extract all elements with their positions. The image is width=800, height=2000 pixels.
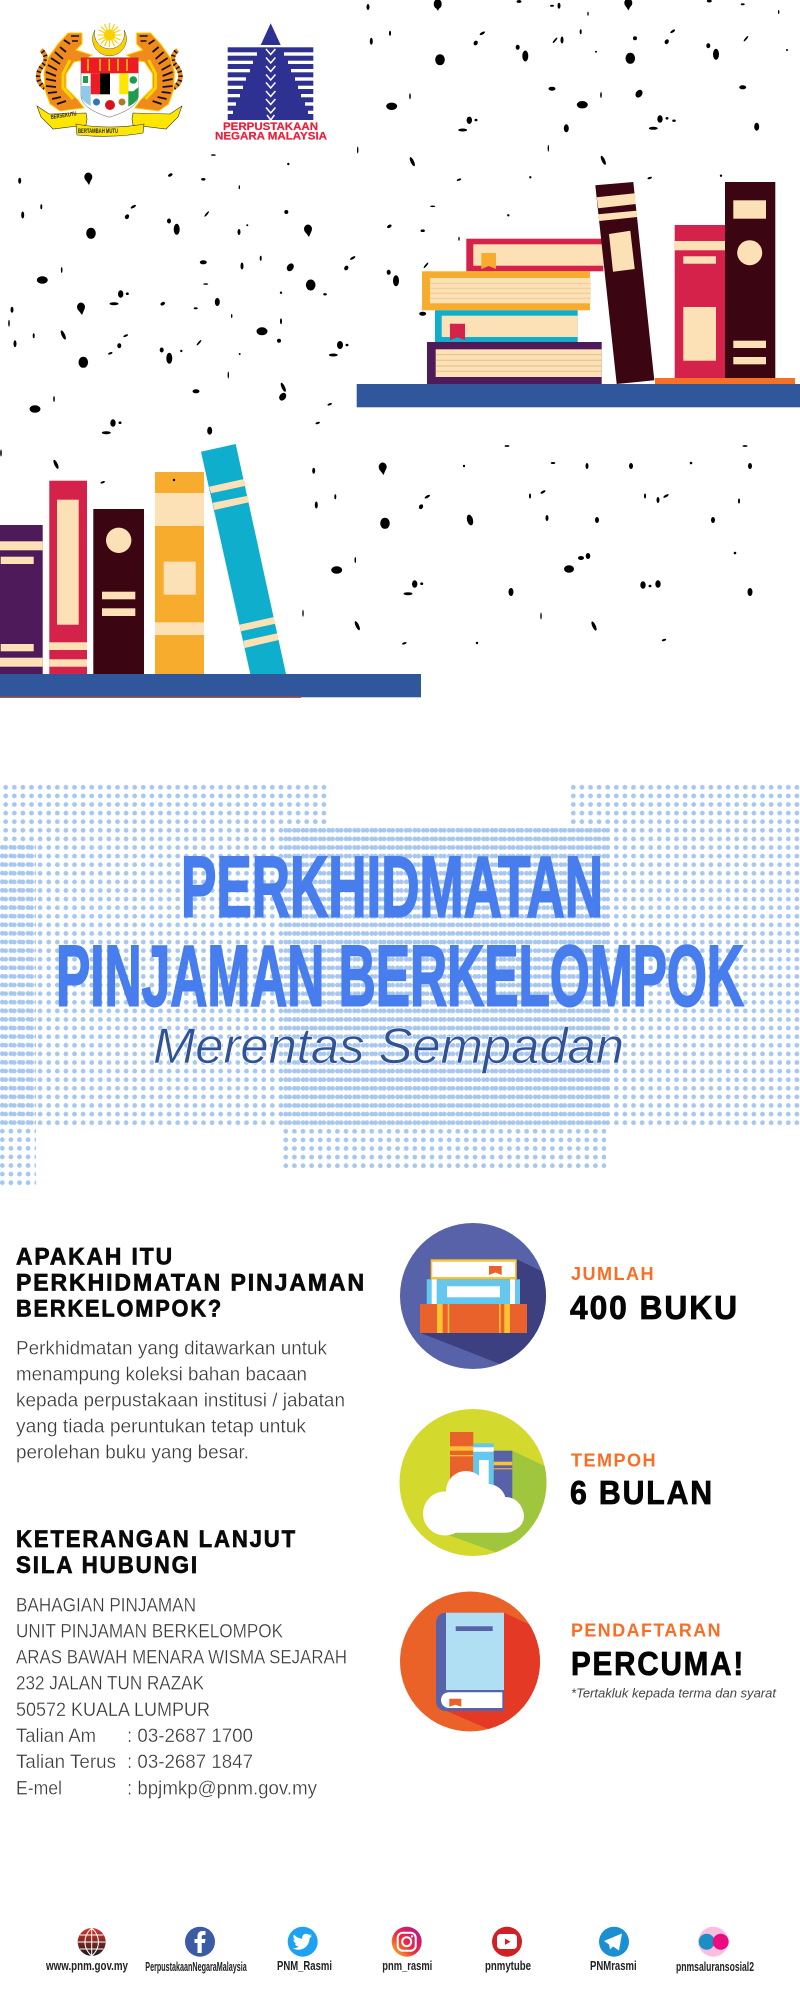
facebook: PerpustakaanNegaraMalaysia bbox=[145, 1960, 247, 1974]
telegram bbox=[590, 1927, 637, 1973]
instagram: pnm_rasmi bbox=[382, 1959, 432, 1973]
motto ribbon bbox=[37, 106, 182, 136]
stat: loan period bbox=[570, 1450, 714, 1511]
text block: contact details bbox=[16, 1526, 347, 1800]
red book bbox=[49, 481, 87, 674]
address and phones: : 03-2687 1847 bbox=[127, 1751, 253, 1773]
upright red book bbox=[675, 225, 725, 378]
address and phones: ARAS BAWAH MENARA WISMA SEJARAH bbox=[16, 1646, 347, 1668]
right tiger bbox=[127, 33, 180, 111]
description: menampung koleksi bahan bacaan bbox=[16, 1364, 307, 1386]
heading: APAKAH ITU bbox=[16, 1244, 174, 1270]
halftone dots bbox=[0, 783, 800, 1187]
logo wordmark bbox=[215, 121, 327, 142]
leaning dark book bbox=[595, 182, 654, 384]
telegram: PNMrasmi bbox=[590, 1959, 637, 1973]
motto ribbon: BERSEKUTU bbox=[50, 111, 77, 121]
address and phones: UNIT PINJAMAN BERKELOMPOK bbox=[16, 1620, 283, 1642]
logo wordmark: NEGARA MALAYSIA bbox=[215, 130, 327, 142]
logo wordmark: PERPUSTAKAAN bbox=[223, 121, 318, 133]
stat: registration free: *Tertakluk kepada terma dan syarat bbox=[571, 1686, 777, 1701]
orange book lying flat bbox=[655, 378, 795, 384]
motto ribbon: BERTAMBAH MUTU bbox=[78, 128, 118, 135]
website: www.pnm.gov.my bbox=[45, 1959, 128, 1973]
stat: total books: JUMLAH bbox=[571, 1263, 655, 1284]
twitter: PNM_Rasmi bbox=[277, 1959, 332, 1973]
facebook bbox=[145, 1927, 247, 1974]
website bbox=[45, 1928, 128, 1973]
description: kepada perpustakaan institusi / jabatan bbox=[16, 1390, 345, 1412]
ink splatter background, upper bbox=[0, 0, 788, 484]
address and phones: : 03-2687 1700 bbox=[127, 1725, 253, 1747]
purple book in stack bbox=[427, 342, 602, 384]
shelf plank bbox=[357, 384, 800, 407]
yellow book bbox=[155, 472, 204, 674]
stat: loan period: TEMPOH bbox=[571, 1450, 657, 1471]
icon: books and cloud in green circle bbox=[400, 1409, 560, 1556]
address and phones: E-mel bbox=[16, 1778, 62, 1800]
description: yang tiada peruntukan tetap untuk bbox=[16, 1416, 306, 1438]
flickr: pnmsaluransosial2 bbox=[676, 1960, 754, 1974]
address and phones bbox=[16, 1594, 347, 1800]
address and phones: 232 JALAN TUN RAZAK bbox=[16, 1672, 204, 1694]
logo: Malaysian coat of arms bbox=[37, 23, 182, 136]
description: perolehan buku yang besar. bbox=[16, 1442, 249, 1464]
description: Perkhidmatan yang ditawarkan untuk bbox=[16, 1338, 327, 1360]
crest: crescent and star bbox=[92, 23, 126, 56]
youtube bbox=[485, 1927, 531, 1973]
instagram bbox=[382, 1927, 432, 1973]
icon: single book in orange circle bbox=[400, 1592, 540, 1732]
ink splatter background, lower right bbox=[302, 445, 752, 645]
heading bbox=[16, 1244, 366, 1322]
upright dark book bbox=[725, 182, 775, 378]
address and phones: Talian Terus bbox=[16, 1751, 116, 1773]
illustration: upper bookshelf bbox=[357, 182, 800, 407]
subtitle: Merentas Sempadan bbox=[153, 1018, 624, 1074]
address and phones: : bpjmkp@pnm.gov.my bbox=[127, 1778, 317, 1800]
stat: registration free: PENDAFTARAN bbox=[571, 1620, 722, 1641]
leaning teal book bbox=[201, 444, 286, 674]
address and phones: BAHAGIAN PINJAMAN bbox=[16, 1594, 196, 1616]
heading: SILA HUBUNGI bbox=[16, 1552, 199, 1579]
text block: what is the service bbox=[16, 1244, 366, 1464]
icon: stack of books in purple circle bbox=[400, 1223, 546, 1369]
red book lying in stack bbox=[466, 239, 604, 271]
stat: total books: 400 BUKU bbox=[570, 1289, 739, 1326]
description bbox=[16, 1338, 345, 1464]
dark book bbox=[93, 509, 144, 674]
logo: Perpustakaan Negara Malaysia bbox=[215, 23, 327, 142]
title block with halftone map background bbox=[0, 783, 800, 1187]
address and phones: Talian Am bbox=[16, 1725, 96, 1747]
shelf plank bbox=[0, 674, 421, 697]
youtube: pnmytube bbox=[485, 1959, 531, 1973]
teal book in stack bbox=[435, 310, 578, 343]
logo mark bbox=[228, 23, 313, 120]
stat: loan period: 6 BULAN bbox=[570, 1474, 714, 1511]
stat: registration free: PERCUMA! bbox=[571, 1645, 745, 1682]
heading: KETERANGAN LANJUT bbox=[16, 1526, 297, 1553]
flickr bbox=[676, 1927, 754, 1974]
heading: PERKHIDMATAN PINJAMAN bbox=[16, 1270, 366, 1296]
left tiger bbox=[38, 33, 92, 111]
illustration: lower bookshelf bbox=[0, 444, 421, 698]
twitter bbox=[277, 1927, 332, 1973]
stat: total books bbox=[570, 1263, 739, 1326]
heading: BERKELOMPOK? bbox=[16, 1296, 223, 1322]
heading bbox=[16, 1526, 297, 1579]
yellow book in stack bbox=[422, 271, 591, 310]
footer: social media links bbox=[45, 1927, 754, 1974]
purple book bbox=[0, 525, 43, 674]
shield bbox=[81, 58, 138, 117]
address and phones: 50572 KUALA LUMPUR bbox=[16, 1699, 210, 1721]
stat: registration free bbox=[571, 1620, 777, 1701]
